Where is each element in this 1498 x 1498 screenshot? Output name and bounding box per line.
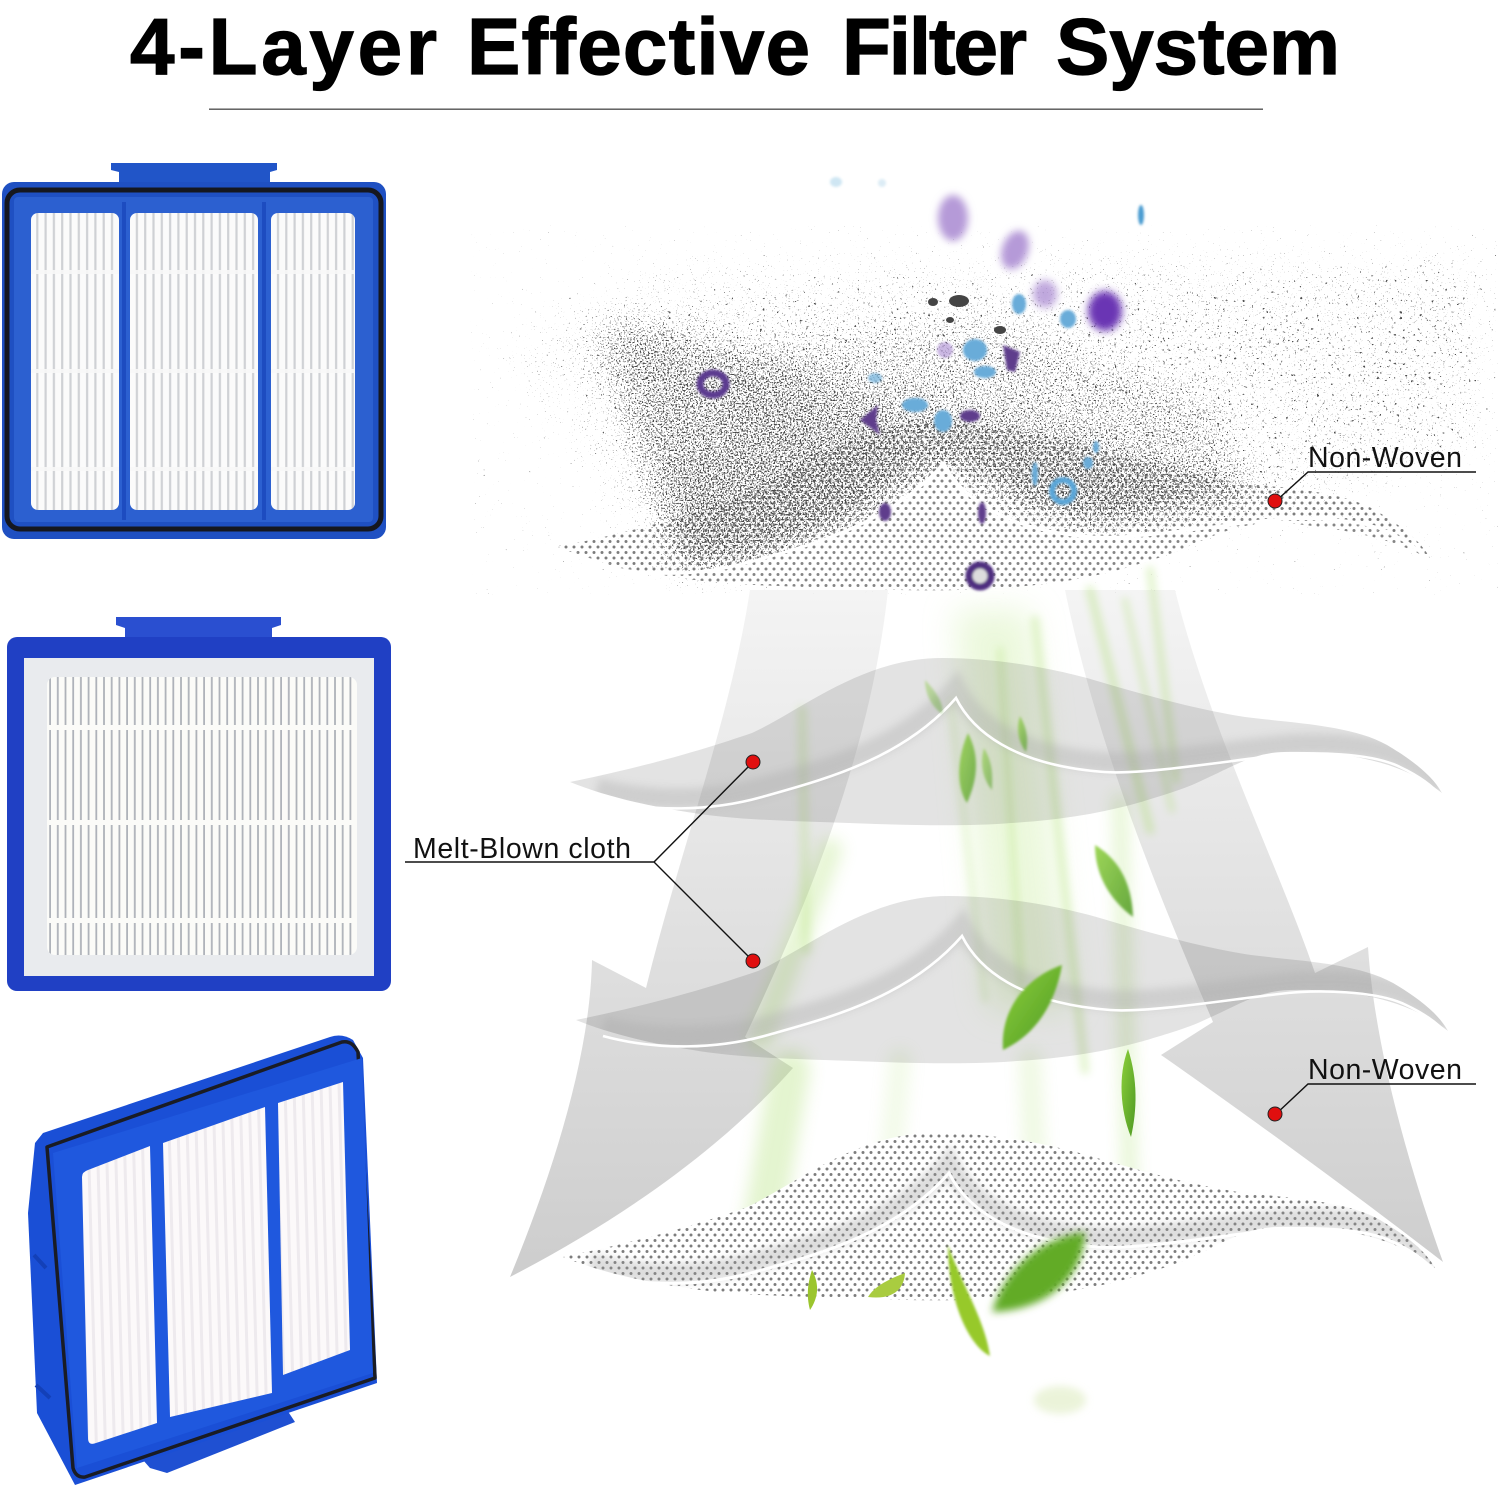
blue donut bbox=[1052, 480, 1074, 502]
leaf bbox=[992, 1232, 1085, 1312]
faint leaf bbox=[1034, 1386, 1086, 1414]
leaf bbox=[1122, 1049, 1136, 1137]
filter tab bbox=[116, 617, 281, 652]
red marker bbox=[1268, 1107, 1282, 1121]
red marker bbox=[1268, 494, 1282, 508]
layer 4: non-woven mesh bbox=[563, 1133, 1435, 1300]
inner plate bbox=[14, 197, 373, 522]
soft purple blobs bbox=[937, 195, 1057, 358]
filter tab bbox=[143, 1410, 295, 1473]
pollen and particles above the mesh bbox=[700, 177, 1144, 587]
filter body bbox=[28, 1036, 377, 1485]
layer 2: melt-blown cloth bbox=[570, 658, 1442, 825]
title: Filter bbox=[842, 2, 1027, 91]
clean air: green light streaks bbox=[760, 570, 1176, 1240]
leaf bbox=[982, 748, 992, 790]
leaf bbox=[925, 680, 943, 714]
layer 1: non-woven mesh front bbox=[558, 463, 1430, 590]
product photo: filter back view bbox=[7, 617, 391, 991]
callout: Non-Woven bottom bbox=[1268, 1054, 1476, 1121]
dust cloud: fine particles bbox=[490, 250, 1490, 575]
filter tab bbox=[111, 163, 277, 184]
callout: Non-Woven bottom: Non-Woven bbox=[1308, 1054, 1462, 1086]
airflow: right grey arrow ribbon bbox=[1065, 590, 1443, 1262]
callout: Melt-Blown cloth: Melt-Blown cloth bbox=[413, 833, 631, 865]
dust cloud: coarse particles bbox=[540, 260, 1490, 550]
faint blue specks bbox=[830, 177, 842, 187]
dark purple blob bbox=[1088, 291, 1122, 331]
red marker upper bbox=[746, 755, 760, 769]
leaf bbox=[1018, 716, 1027, 752]
back ribs bbox=[34, 1255, 50, 1398]
purple donut bottom bbox=[969, 565, 991, 587]
layer 1: non-woven mesh back bbox=[558, 423, 1430, 590]
product photo: filter angled view bbox=[28, 1036, 377, 1485]
pleated media bbox=[47, 677, 357, 955]
pleated panels bbox=[31, 200, 355, 520]
filter frame bbox=[2, 182, 386, 539]
callout: Non-Woven top: Non-Woven bbox=[1308, 442, 1462, 474]
leaf bbox=[1095, 845, 1133, 917]
title: Effective bbox=[467, 2, 810, 91]
leaf bbox=[808, 1270, 817, 1310]
red marker lower bbox=[746, 954, 760, 968]
pleated panels bbox=[82, 1082, 350, 1444]
leaf bbox=[868, 1273, 905, 1298]
purple fragments bbox=[860, 345, 1020, 524]
title: 4-Layer bbox=[130, 2, 437, 91]
inner plate bbox=[53, 1058, 373, 1468]
dust: large black specks bbox=[928, 295, 1006, 334]
blue fragments bbox=[868, 205, 1144, 486]
leaf bbox=[948, 1245, 990, 1356]
leaf bbox=[1003, 965, 1062, 1050]
airflow: left grey arrow ribbon bbox=[510, 590, 888, 1277]
leaves: middle layers bbox=[925, 680, 1136, 1137]
purple donut left bbox=[700, 373, 726, 395]
leaves: falling below the filter bbox=[808, 1232, 1086, 1414]
black gasket bbox=[7, 190, 381, 529]
title: System bbox=[1056, 2, 1340, 91]
layer 3: melt-blown cloth bbox=[576, 896, 1448, 1063]
callout: Melt-Blown cloth bbox=[405, 755, 760, 968]
filter frame bbox=[7, 637, 391, 991]
translucent sheet bbox=[24, 658, 374, 976]
black gasket bbox=[47, 1042, 375, 1477]
product photo: filter front view bbox=[2, 163, 386, 539]
leaf bbox=[959, 733, 976, 803]
callout: Non-Woven top bbox=[1268, 442, 1476, 508]
